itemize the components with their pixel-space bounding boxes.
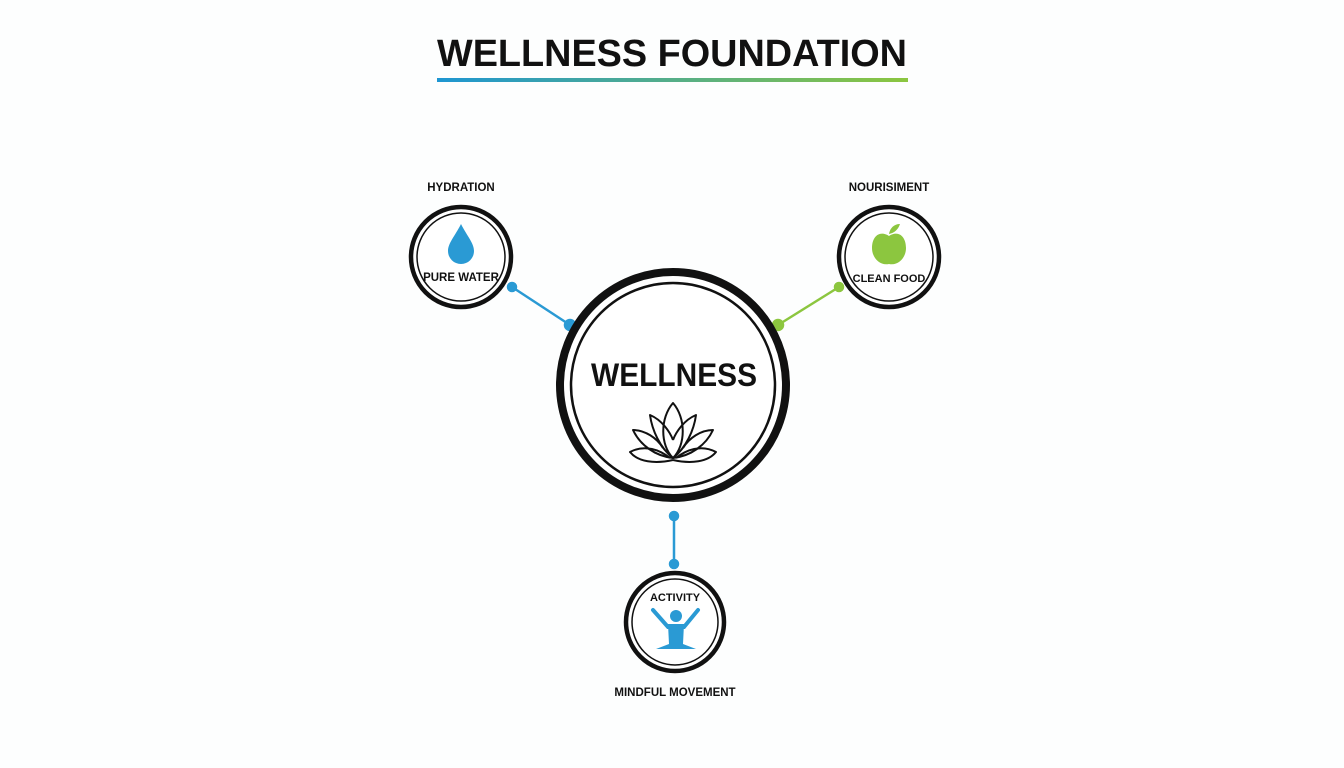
node: activity: MINDFUL MOVEMENT	[614, 687, 736, 699]
center circle: wellness	[560, 272, 786, 498]
node: nourishment: NOURISIMENT	[849, 182, 929, 194]
connector: nourishment	[773, 283, 843, 330]
node: hydration: PURE WATER	[423, 272, 500, 284]
icon: water drop	[448, 224, 474, 264]
connector: hydration	[508, 283, 575, 330]
node: activity	[614, 573, 736, 699]
node: hydration: HYDRATION	[427, 182, 495, 194]
icon: person	[653, 610, 698, 649]
center circle: wellness: WELLNESS	[591, 357, 757, 393]
node: nourishment: CLEAN FOOD	[853, 273, 925, 285]
node: nourishment	[839, 182, 939, 307]
node: hydration	[411, 182, 511, 307]
node: activity: ACTIVITY	[650, 592, 701, 604]
connector: activity	[670, 512, 678, 568]
title: WELLNESS FOUNDATION	[437, 33, 907, 75]
icon: apple	[872, 224, 906, 264]
icon: lotus	[630, 403, 716, 462]
